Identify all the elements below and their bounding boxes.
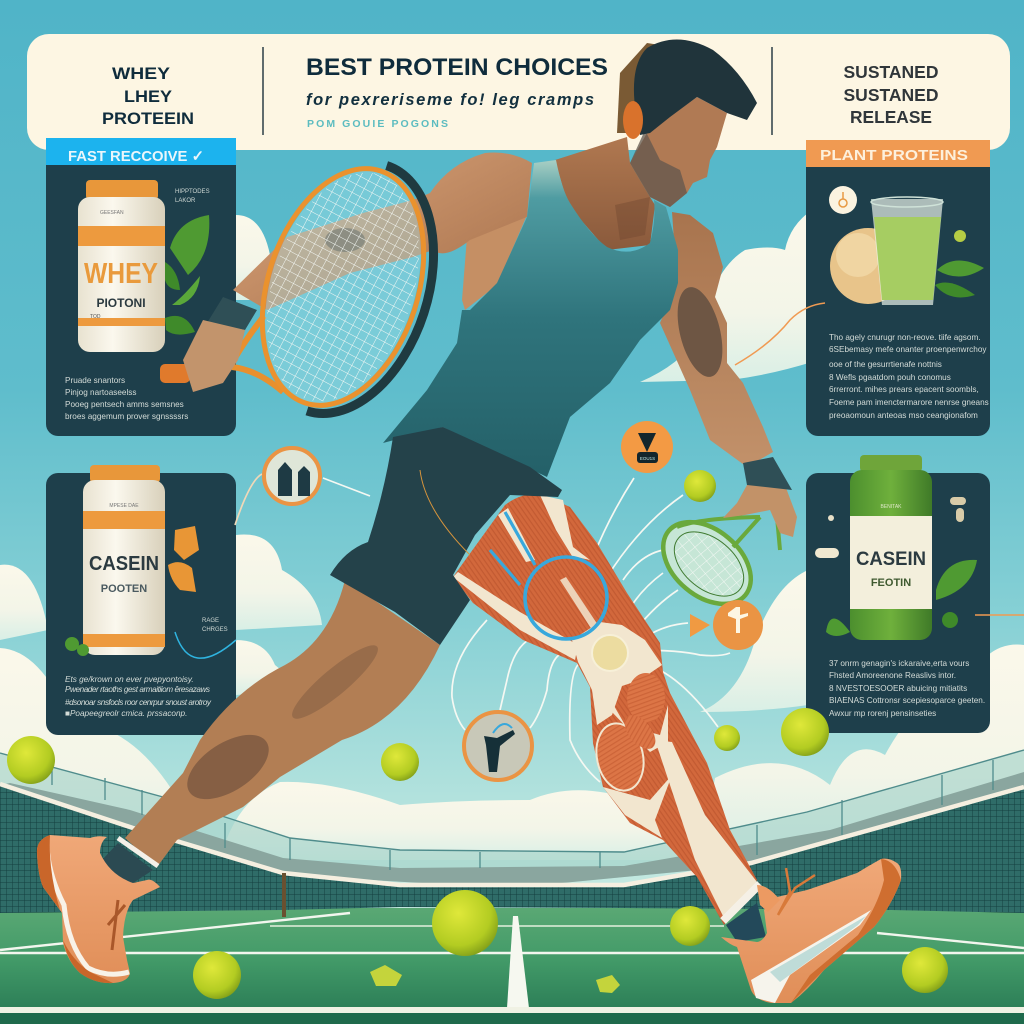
icon: whey bottle: WHEY bbox=[84, 258, 158, 290]
text block: casein right notes: Fhsted Amoreenone Reaslivs intor. bbox=[829, 671, 956, 680]
text block: casein right notes: BIAENAS Cottronsr scepiesoparce geeten. bbox=[829, 696, 985, 705]
heading left: whey protein: LHEY bbox=[124, 87, 173, 106]
panel: casein left bbox=[46, 465, 236, 735]
icon: orange triangle bbox=[690, 614, 710, 637]
main title bbox=[306, 54, 608, 130]
icon: circle marker bbox=[829, 186, 857, 214]
text block: casein right notes: 8 NVESTOESOOER abuicing mitiatits bbox=[829, 684, 967, 693]
head face bbox=[630, 97, 727, 207]
icon: whey bottle bbox=[78, 180, 165, 352]
icon: casein bottle bbox=[83, 465, 165, 655]
icon: whey bottle: PIOTONI bbox=[96, 296, 146, 310]
icon: green casein bottle: FEOTIN bbox=[871, 577, 911, 589]
icon: green casein bottle: CASEIN bbox=[856, 549, 926, 570]
icon: green peas bbox=[65, 637, 89, 656]
heading right: sustained release: SUSTANED bbox=[844, 85, 938, 105]
blue circle highlight bbox=[525, 557, 607, 639]
icon: player circle bottom bbox=[464, 712, 532, 780]
tank top bbox=[383, 160, 678, 477]
right arm bbox=[660, 212, 773, 467]
right hand bbox=[723, 480, 797, 537]
text block: plant notes: Tho agely cnurugr non-reove. tiife agsom. bbox=[829, 333, 981, 342]
connector lines bbox=[235, 474, 730, 782]
left sock bbox=[102, 838, 158, 883]
icon: circle player top bbox=[264, 448, 320, 504]
icon: protein ball bbox=[830, 228, 906, 304]
small racket bbox=[647, 506, 780, 620]
heading left: whey protein bbox=[102, 64, 194, 128]
connector: orange arrow line bbox=[975, 614, 1024, 616]
torso skin under shirt bbox=[462, 137, 655, 310]
tab: plant proteins: PLANT PROTEINS bbox=[820, 147, 968, 164]
label: race charges: CHRGES bbox=[202, 627, 228, 633]
icon: leaves bbox=[935, 230, 984, 297]
lower leg muscles bbox=[590, 673, 665, 795]
heading left: whey protein: WHEY bbox=[112, 64, 171, 83]
icon: orange badge: EOU1S bbox=[640, 456, 655, 461]
icon: leaves bbox=[165, 215, 209, 335]
heading right: sustained release: RELEASE bbox=[850, 107, 932, 127]
hair bbox=[617, 39, 757, 135]
text block: whey notes: Pinjog nartoaseelss bbox=[65, 388, 136, 397]
right sock bbox=[723, 884, 766, 942]
heading left: whey protein: PROTEEIN bbox=[102, 109, 194, 128]
neck shading bbox=[615, 197, 650, 240]
text block: plant notes: preoaomoun anteoas mso ceangionafom bbox=[829, 411, 978, 420]
heading right: sustained release: SUSTANED bbox=[844, 62, 938, 82]
panel: fast recovery whey bbox=[46, 138, 236, 436]
heading right: sustained release bbox=[844, 62, 938, 127]
icon: casein bottle: MPESE DAE bbox=[109, 503, 139, 509]
main title: for pexreriseme fo! leg cramps bbox=[306, 91, 594, 109]
blue straps bbox=[490, 512, 535, 585]
clouds bbox=[0, 210, 1024, 860]
main title: POM GOUIE POGONS bbox=[307, 118, 448, 130]
rear leg muscle shading bbox=[176, 637, 385, 812]
icon: orange person circle bbox=[713, 600, 763, 650]
icon: whey bottle: TOD bbox=[90, 314, 101, 320]
icon: orange pieces bbox=[168, 526, 199, 592]
text block: whey notes: Pruade snantors bbox=[65, 376, 125, 385]
text block: casein notes: Pwenader rtaoths gest armaitiiom êresazaws bbox=[65, 685, 210, 694]
icon: casein bottle: CASEIN bbox=[89, 553, 159, 575]
left arm bbox=[233, 152, 532, 310]
ground crumbs bbox=[370, 965, 620, 993]
icon: green casein bottle: BENITAK bbox=[880, 504, 902, 510]
tennis court bbox=[0, 908, 1024, 1024]
tennis net bbox=[0, 784, 1024, 917]
shorts bbox=[330, 427, 562, 645]
tab: plant proteins bbox=[806, 140, 990, 167]
text block: plant notes bbox=[829, 333, 989, 420]
text block: plant notes: ooe of the gesurrtienafe nottnis bbox=[829, 360, 942, 369]
text block: plant notes: 6rrerront. mihes prears epacent soombls, bbox=[829, 385, 979, 394]
text block: casein notes: Ets ge/krown on ever pvepyontoisy. bbox=[65, 675, 194, 684]
icon: orange badge bbox=[621, 421, 673, 473]
text block: casein right notes: Awxur mp rorenj pensinseties bbox=[829, 709, 936, 718]
connector: plant panel arrow bbox=[735, 303, 825, 365]
header banner bbox=[27, 34, 1010, 150]
text block: casein notes: ■Poapeegreolr cmica. prssaconp. bbox=[65, 709, 187, 718]
text block: casein notes bbox=[65, 675, 212, 718]
knee cap bbox=[592, 635, 628, 671]
anatomical leg bbox=[453, 494, 757, 925]
label: hipptodes: LAKOR bbox=[175, 198, 196, 204]
panel: casein right bbox=[806, 455, 990, 733]
icon: whey bottle: GEESFAN bbox=[100, 210, 124, 216]
text block: plant notes: 8 Wefls pgaatdom pouh conomus bbox=[829, 373, 951, 382]
icon: casein bottle: POOTEN bbox=[101, 583, 147, 595]
text block: whey notes: broes aggemum prover sgnssssrs bbox=[65, 412, 188, 421]
wrist bands bbox=[207, 297, 792, 490]
thigh tendons bbox=[453, 495, 757, 922]
left hand bbox=[183, 320, 245, 392]
tennis racket bbox=[160, 141, 464, 436]
icon: leaves and pills bbox=[815, 497, 977, 636]
tab: fast recovery: FAST RECCOIVE ✓ bbox=[68, 148, 204, 165]
label: hipptodes: HIPPTODES bbox=[175, 189, 210, 195]
label: race charges: RAGE bbox=[202, 618, 219, 624]
left shoe bbox=[37, 835, 160, 983]
panel: plant proteins bbox=[806, 140, 990, 436]
tab: fast recovery bbox=[46, 138, 236, 165]
icon: green casein bottle bbox=[850, 455, 932, 640]
connector: blue arc bbox=[175, 632, 236, 658]
right shoe bbox=[721, 858, 901, 1003]
tennis balls bbox=[7, 470, 948, 999]
text block: plant notes: Foeme pam imenctermarore nenrse gneans bbox=[829, 398, 989, 407]
beard shading bbox=[630, 130, 687, 207]
text block: whey notes bbox=[65, 376, 188, 421]
text block: casein right notes: 37 onrm genagin's ickaraive,erta vours bbox=[829, 659, 969, 668]
ear bbox=[623, 101, 643, 139]
text block: casein right notes bbox=[829, 659, 985, 718]
icon: green juice glass bbox=[871, 197, 943, 305]
stadium fence and crowd bbox=[0, 750, 1024, 888]
rear leg bbox=[125, 580, 440, 867]
header dividers bbox=[263, 47, 772, 135]
text block: casein notes: #dsonoar snsfocls roor cenrpur snoust arotroy bbox=[65, 698, 212, 707]
text block: plant notes: 6SEbemasy mefe onanter proenpenwrchoy bbox=[829, 345, 987, 354]
text block: whey notes: Pooeg pentsech amms semsnes bbox=[65, 400, 184, 409]
main title: BEST PROTEIN CHOICES bbox=[306, 54, 608, 81]
